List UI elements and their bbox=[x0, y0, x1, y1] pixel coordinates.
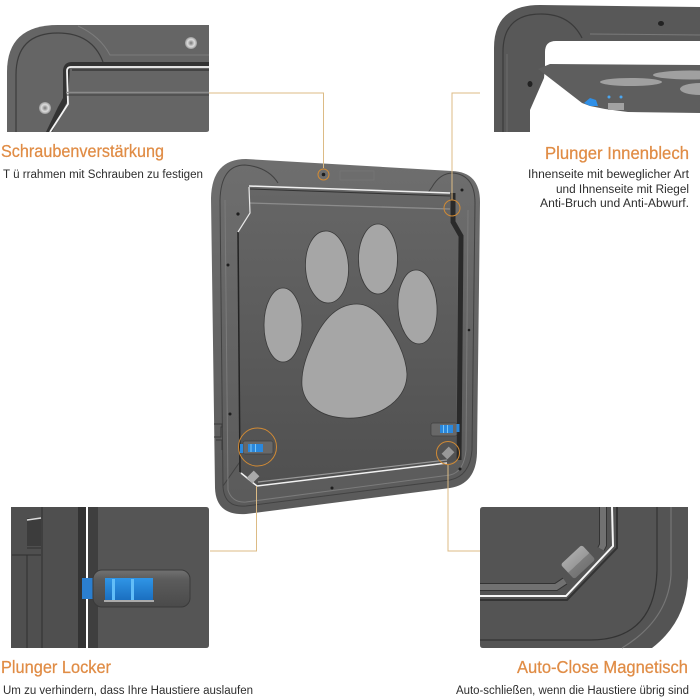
text: plunger plate description: Ihnenseite mit beweglicher Art bbox=[528, 169, 690, 181]
magnet left bbox=[247, 471, 259, 483]
heading: Plunger Innenblech: Plunger Innenblech bbox=[545, 143, 689, 163]
latch right bbox=[431, 423, 460, 436]
callout ring: screw bbox=[318, 169, 329, 180]
paw pad: right toe bbox=[396, 269, 439, 345]
screw holes and slots bbox=[226, 173, 470, 489]
paw pad: main pad bbox=[302, 304, 407, 418]
text: locker description: Um zu verhindern, dass Ihre Haustiere auslaufen bbox=[3, 685, 253, 697]
callout line: plunger inner plate bbox=[452, 93, 480, 200]
icon: screw head left bbox=[39, 102, 51, 114]
latch left bbox=[240, 441, 273, 454]
callout ring: locker bbox=[238, 428, 276, 466]
lock housing bbox=[93, 570, 190, 607]
panel: auto-close magnet close-up bbox=[480, 507, 688, 648]
heading: Schraubenverstärkung: Schraubenverstärkung bbox=[1, 141, 164, 161]
text: magnet description: Auto-schließen, wenn die Haustiere übrig sind bbox=[456, 685, 689, 697]
paw pad: upper middle toe bbox=[358, 224, 398, 294]
callout line: auto-close magnet bbox=[448, 465, 480, 551]
callout line: screw reinforcement bbox=[209, 93, 324, 168]
panel: plunger locker close-up bbox=[11, 507, 209, 648]
panel: screw reinforcement close-up bbox=[7, 25, 209, 132]
icon: screw head top bbox=[185, 37, 197, 49]
text: plunger plate description: Anti-Bruch und Anti-Abwurf. bbox=[540, 198, 689, 210]
panel: pet door main view bbox=[211, 159, 480, 514]
callout ring: magnet bbox=[436, 442, 460, 464]
text: plunger plate description: und Ihnenseite mit Riegel bbox=[556, 184, 689, 196]
magnet right bbox=[442, 447, 454, 459]
callout line: plunger locker bbox=[210, 486, 256, 551]
paw pad: upper left toe bbox=[304, 230, 350, 304]
door frame bbox=[211, 159, 480, 514]
text: plunger plate description bbox=[528, 169, 690, 210]
blue plunger tab bbox=[82, 578, 94, 599]
plunger plate flap bbox=[538, 64, 700, 113]
heading: Plunger Locker: Plunger Locker bbox=[1, 657, 111, 677]
heading: Auto-Close Magnetisch: Auto-Close Magnetisch bbox=[517, 657, 688, 677]
paw pad: left toe bbox=[264, 288, 302, 362]
door inner panel bbox=[238, 187, 458, 486]
callout ring: plunger plate bbox=[444, 200, 460, 216]
text: screw description: T ü rrahmen mit Schrauben zu festigen bbox=[3, 169, 203, 181]
magnet block bbox=[561, 545, 595, 579]
panel: plunger inner plate close-up bbox=[494, 5, 700, 132]
